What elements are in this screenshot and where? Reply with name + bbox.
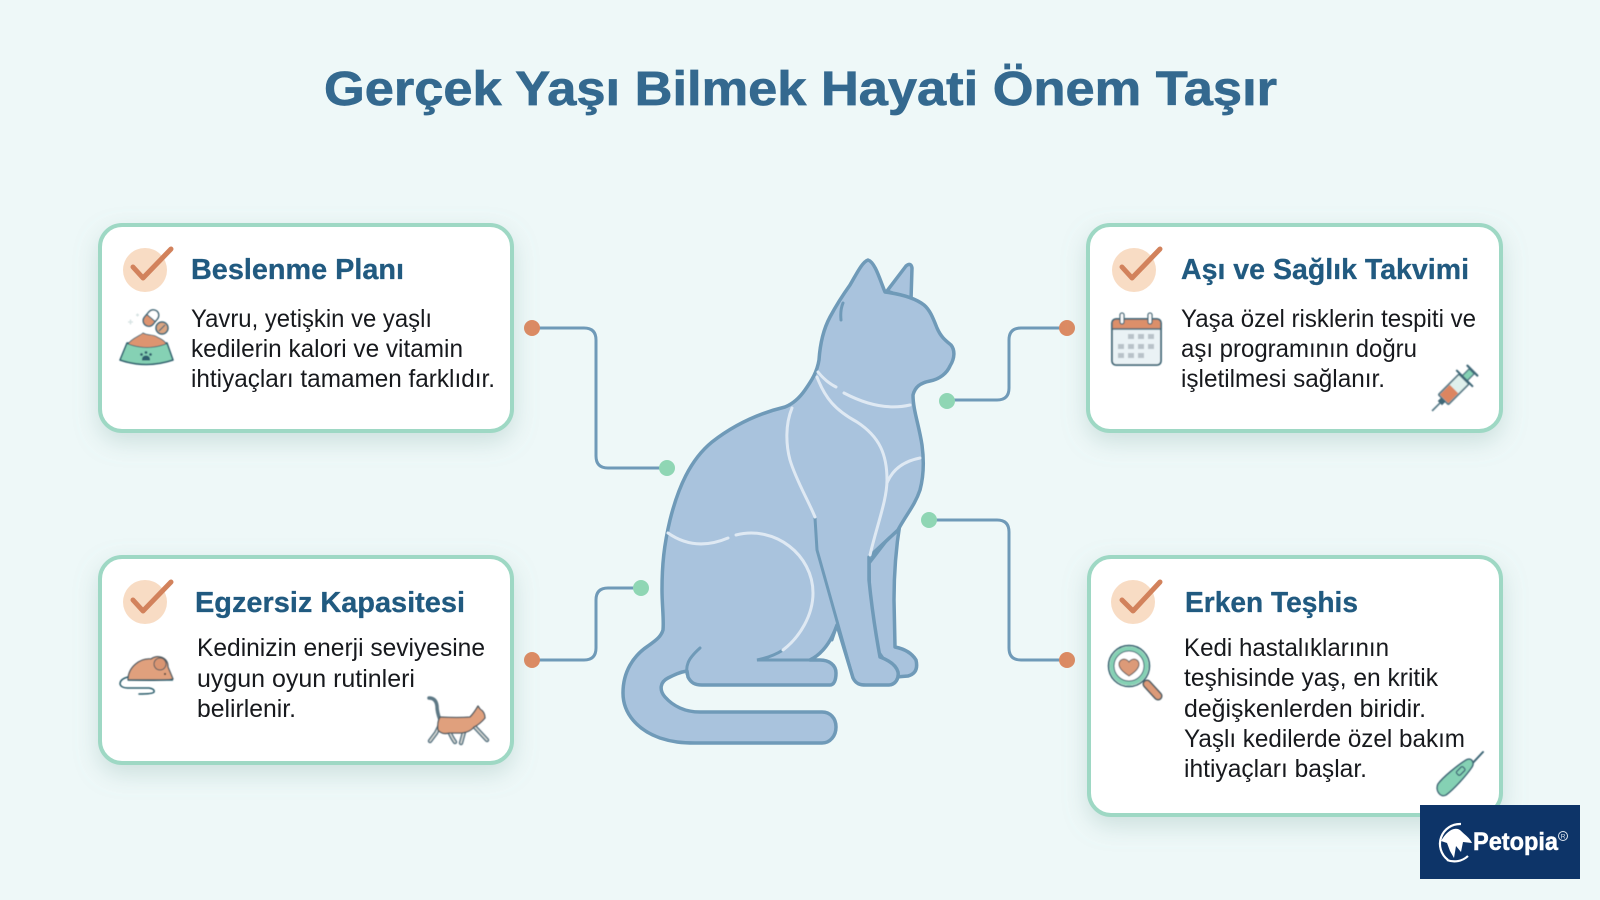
icon: walking cat [429,698,487,743]
logo: Petopia [1420,805,1580,879]
body text [191,305,495,393]
body text: ihtiyaçları tamamen farklıdır. [191,365,495,393]
cat light fur lines [668,372,920,650]
body text: işletilmesi sağlanır. [1181,365,1385,393]
icon: check [123,580,171,624]
cat dark inner lines [687,303,898,678]
cat body silhouette [623,260,954,743]
logo mark [1440,824,1472,861]
title: Gerçek Yaşı Bilmek Hayati Önem Taşır [324,63,1277,116]
connector: Egzersiz Kapasitesi to cat [524,580,649,668]
registered mark [1558,832,1568,840]
heading: Aşı ve Sağlık Takvimi [1181,254,1469,286]
cat far ear [887,264,912,300]
body text: teşhisinde yaş, en kritik [1184,664,1438,692]
icon: mouse [120,657,173,694]
heading: Erken Teşhis [1185,587,1358,619]
logo wordmark: Petopia [1473,828,1559,856]
body text: kedilerin kalori ve vitamin [191,335,463,363]
icon: food bowl with vitamins [120,308,173,364]
icon: check [123,248,171,292]
cat back front leg [869,523,917,677]
heading: Beslenme Planı [191,254,404,286]
icon: check [1112,248,1160,292]
connector: Aşı ve Sağlık Takvimi to cat [939,320,1075,409]
body text: değişkenlerden biridir. [1184,695,1426,723]
icon: calendar [1112,313,1161,365]
body text: aşı programının doğru [1181,335,1417,363]
icon: thermometer [1437,752,1483,796]
registered mark: R [1561,834,1566,840]
cat illustration [623,260,954,743]
body text: ihtiyaçları başlar. [1184,755,1367,783]
body text: Yaşa özel risklerin tespiti ve [1181,305,1476,333]
body text: Yavru, yetişkin ve yaşlı [191,305,432,333]
panel: Erken Teşhis [1089,557,1501,815]
body text: Kedinizin enerji seviyesine [197,634,485,662]
body text [1184,634,1465,783]
body text: Yaşlı kedilerde özel bakım [1184,725,1465,753]
body text [197,634,485,723]
panel: Beslenme Planı [100,225,512,431]
icon: check [1111,580,1160,624]
panel: Aşı ve Sağlık Takvimi [1088,225,1501,431]
connector: Beslenme Planı to cat [524,320,675,476]
body text [1181,305,1476,393]
icon: syringe [1424,363,1480,419]
body text: uygun oyun rutinleri [197,665,415,693]
heading: Egzersiz Kapasitesi [195,587,465,619]
body text: belirlenir. [197,695,296,723]
panel: Egzersiz Kapasitesi [100,557,512,763]
connector: Erken Teşhis to cat [921,512,1075,668]
body text: Kedi hastalıklarının [1184,634,1389,662]
icon: magnifier with heart [1108,646,1158,696]
